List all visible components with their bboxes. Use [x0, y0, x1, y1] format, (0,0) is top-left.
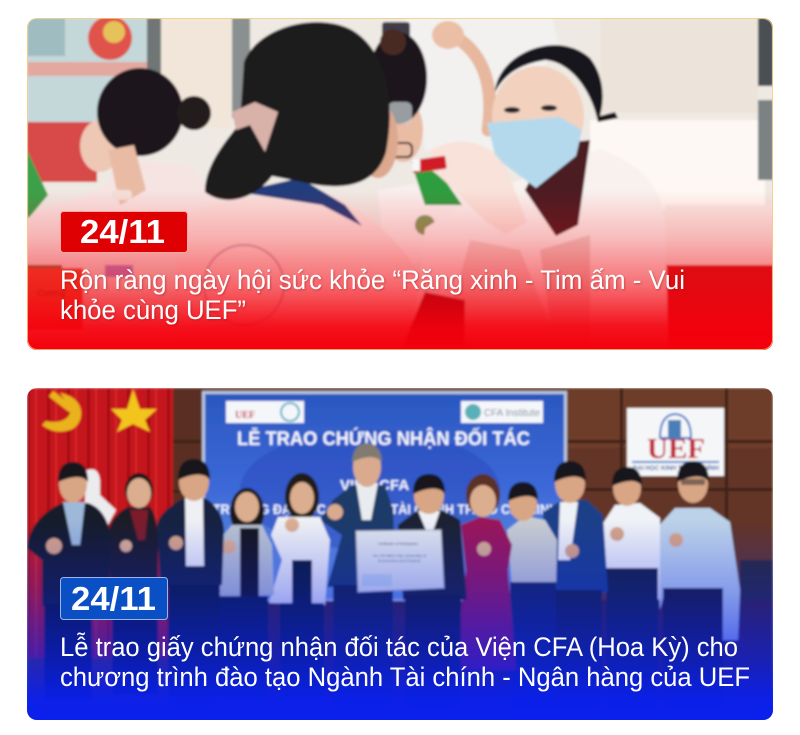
- UEF wall sign: [627, 408, 724, 476]
- heading: CFA certificate title: [60, 631, 750, 692]
- curtain: [27, 388, 173, 658]
- person 4: grey blazer: [218, 488, 274, 701]
- certificate: Ho Chi Minh City University of: [373, 553, 427, 558]
- student being examined: [372, 28, 462, 236]
- person 7: dark suit: [398, 474, 467, 707]
- heading: health day title: khỏe cùng UEF”: [60, 295, 246, 325]
- person 9: grey shirt: [507, 482, 557, 707]
- logo: UEF box: UEF: [235, 410, 255, 421]
- person 10: blue suit: [542, 460, 609, 675]
- logo: UEF box: [226, 401, 304, 423]
- plaster bust: [85, 469, 116, 525]
- date badge: red: [60, 212, 188, 252]
- woman seen from behind: [202, 20, 410, 315]
- UEF wall sign: ĐẠI HỌC KINH TẾ TÀI CHÍNH: [633, 462, 719, 472]
- person 8: magenta dress: [454, 474, 516, 670]
- heading: CFA certificate title: Lễ trao giấy chứng nhận đối tác của Viện CFA (Hoa Kỳ) cho: [60, 631, 738, 662]
- certificate: [356, 530, 444, 592]
- screen title: LỄ TRAO CHỨNG NHẬN ĐỐI TÁC: [237, 428, 530, 450]
- photo: dental check at the health festival: Cương: [37, 288, 65, 298]
- red gradient overlay: [27, 190, 773, 350]
- certificate: Certificate of Participation: [378, 542, 418, 546]
- person 2: dark suit: [109, 473, 158, 695]
- heading: health day title: [60, 265, 685, 325]
- person 1: dark suit: [27, 462, 111, 700]
- person 3: navy suit white shirt: [157, 459, 224, 705]
- date badge: blue: [60, 578, 168, 620]
- heading: health day title: Rộn ràng ngày hội sức khỏe “Răng xinh - Tim ấm - Vui: [60, 265, 685, 295]
- certificate: Economics and Finance: [378, 558, 421, 563]
- person 5: white blazer: [269, 473, 330, 703]
- projection screen: [202, 391, 567, 601]
- left student in lab coat: [27, 68, 225, 265]
- person 12: light blue shirt: [658, 460, 742, 668]
- person in white shirt behind: [382, 18, 560, 150]
- panel: health day card: [27, 16, 773, 355]
- blue gradient overlay: [27, 520, 773, 720]
- logo: CFA Institute box: [461, 401, 543, 423]
- panel: CFA certificate card: [27, 388, 773, 720]
- projection screen: TRƯỜNG ĐẠI HỌC KINH TẾ - TÀI CHÍNH TP. HỒ CHÍ MINH: [213, 500, 558, 517]
- heading: CFA certificate title: chương trình đào tạo Ngành Tài chính - Ngân hàng của UEF: [60, 662, 750, 692]
- person 11: white shirt: [602, 467, 660, 708]
- logo: CFA Institute box: CFA Institute: [484, 408, 540, 419]
- card border: [28, 18, 772, 350]
- date badge: blue: 24/11: [71, 580, 156, 617]
- photo: dental check at the health festival: [27, 16, 773, 355]
- icon: hammer and sickle: [42, 391, 81, 432]
- date badge: red: 24/11: [80, 213, 165, 250]
- examiner with mask and flashlight: [400, 45, 668, 352]
- icon: yellow star: [111, 389, 157, 432]
- projection screen: VIỆN CFA: [340, 476, 409, 494]
- group of people: [27, 443, 740, 708]
- photo: CFA partnership ceremony: [27, 388, 773, 720]
- person 6: tall navy suit: [320, 443, 394, 705]
- UEF wall sign: UEF: [647, 434, 705, 465]
